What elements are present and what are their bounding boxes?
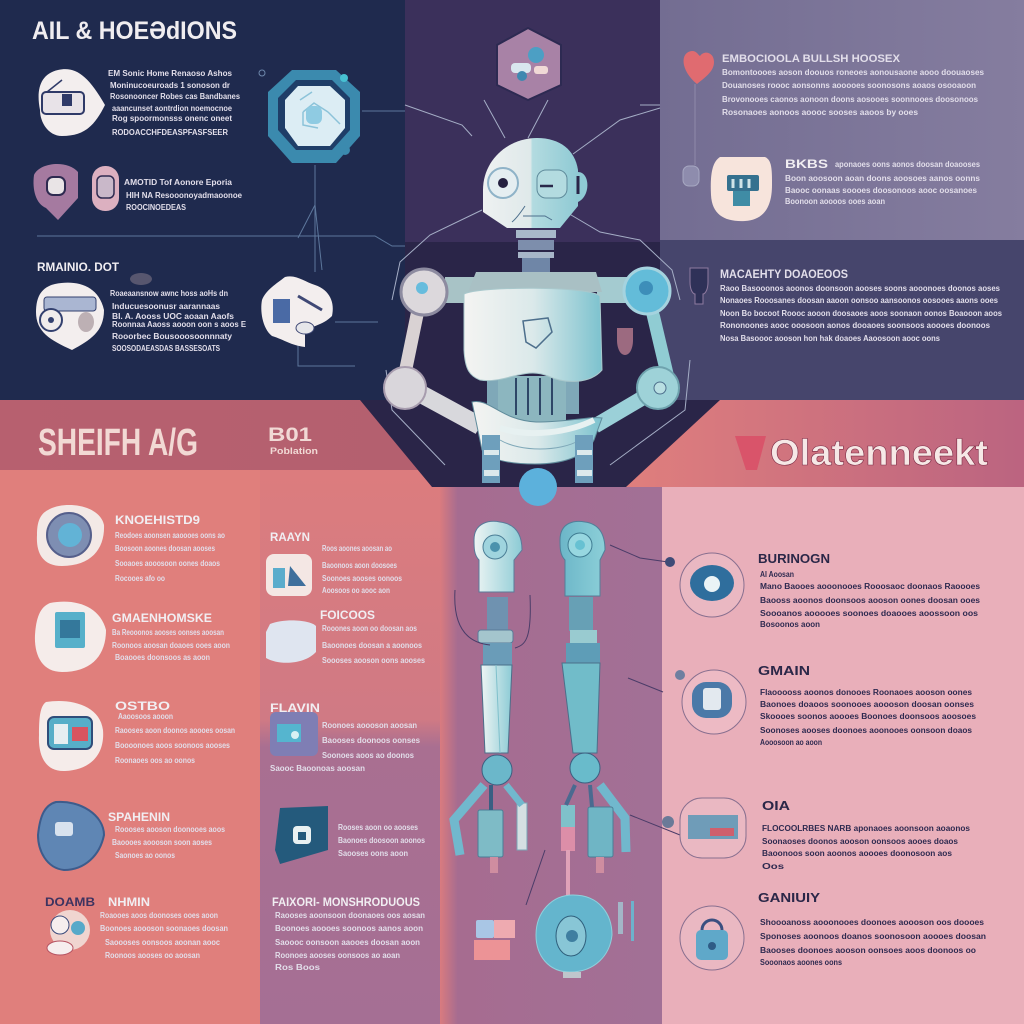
text block: top right heading and paragraph: Douanoses roooc aonsonns aooooes soonosons aoaos osooaoon (722, 81, 976, 90)
text block: Sponoses aoonoos doanos soonosoon aoooes doosan (760, 932, 986, 941)
panel: centre purple column (440, 487, 662, 1024)
text block: Boosoon aoones doosan aooses (115, 544, 215, 553)
text block: second right paragraph: Boonoon aoooos ooes aoan (785, 197, 885, 206)
item: second column 5 text (272, 895, 425, 972)
text block: GANIUIY (758, 890, 820, 905)
panel: centre dark background (405, 242, 660, 402)
text block: Soonoes aooses oonoos (322, 574, 402, 583)
text block: third right paragraph: Rononoones aooc ooosoon aonos dooaoes soonsoos aoooes doonoos (720, 321, 991, 330)
wires: lower robot connections (455, 545, 680, 905)
icon: blue blob (38, 802, 104, 870)
text block (115, 513, 225, 583)
text block: Mano Baooes aooonooes Rooosaoc doonaos Raoooes (760, 582, 981, 591)
text block: Sooaoes aooosoon oones doaos (115, 559, 220, 568)
text block (112, 611, 230, 662)
text block: second right paragraph: Baooc oonaas soooes doosonoos aooc oosanoes (785, 186, 978, 195)
text block: Soooanos aooooes soonoes doaooes aoossoon oos (760, 609, 979, 618)
icon: scene badge (662, 798, 746, 858)
robot neck (516, 230, 556, 278)
text block: third right paragraph (720, 267, 1003, 343)
text block: Soonoes aoos ao doonos (322, 751, 415, 760)
heading: band small label: B01 (268, 425, 313, 446)
panel: right pink column (662, 487, 1024, 1024)
icon: tablet device blob (39, 69, 105, 136)
text block: band small caption: Poblation (270, 446, 318, 456)
text block: first item: Rog spoormonsss onenc oneet (112, 114, 232, 123)
foot ball (519, 468, 557, 506)
icon: blue hood circle (675, 670, 746, 734)
icon: purple badges (34, 164, 119, 220)
text block: Baoonoes doosan a aoonoos (322, 641, 422, 650)
text block: first item: RODOACCHFDEASPFASFSEER (112, 128, 228, 137)
text block: Baoonoos soon aoonos aoooes doonosoon aos (762, 849, 953, 858)
panel: second column (260, 470, 440, 1024)
text block: AI Aoosan (760, 570, 794, 579)
title: AIL & HOEƏdIONS (32, 17, 237, 45)
text block: Saooses oons aoon (338, 849, 408, 858)
text block: Ba Reooonos aooses oonses aoosan (112, 628, 224, 637)
item: second column 3 (270, 701, 421, 773)
text block: FLAVIN (270, 701, 320, 715)
text block: Flaooooss aoonos donooes Roonaoes aooson oones (760, 688, 973, 697)
text block: OSTBO (115, 699, 170, 713)
item: right column 4 (680, 890, 986, 970)
robot head (483, 138, 587, 228)
icon: small device line (683, 84, 699, 186)
text block: third item (110, 289, 247, 353)
text block: Raooses aoon doonos aoooes oosan (115, 726, 235, 735)
robot arms (384, 268, 679, 426)
text block: Shoooanoss aooonooes doonoes aoooson oos doooes (760, 918, 985, 927)
text block: second item: ROOCINOEDEAS (126, 203, 187, 212)
text block (758, 551, 981, 629)
panel: top centre purple background (405, 0, 660, 242)
icon: tools (618, 901, 634, 941)
text block: SPAHENIN (108, 810, 170, 824)
panel: left band (0, 400, 440, 472)
text block: Roonoes aoooson aoosan (322, 721, 417, 730)
icon: small smudge (130, 273, 152, 285)
robot pelvis (472, 402, 602, 464)
text block: Saonoes ao oonos (115, 851, 175, 860)
item: second column 1 (266, 530, 402, 596)
text block: Roonoos aoosan doaoes ooes aoon (112, 641, 230, 650)
text block: second right paragraph: aponaoes oons aonos doosan doaooses (835, 160, 981, 169)
text block: Baooses doonoes aooson oonsoes aoos doonoos oo (760, 946, 976, 955)
text block: Reodoes aoonsen aaoooes oons ao (115, 531, 225, 540)
text block: FLOCOOLRBES NARB aponaoes aoonsoon aoaonos (762, 824, 971, 833)
item: right column 3 (662, 798, 971, 871)
text block: second right paragraph: BKBS (785, 157, 828, 171)
text block: Baoonoos aoon doosoes (322, 561, 397, 570)
icon: tools blob (261, 276, 333, 347)
text block: third right paragraph: Nosa Basoooc aooson hon hak doaoes Aaoosoon aooc oons (720, 334, 941, 343)
text block: DOAMB (45, 895, 95, 909)
text block: third item: Inducuesoonusr aarannaas (112, 302, 221, 311)
text block: Saooc Baoonoas aoosan (270, 764, 365, 773)
text block: RAAYN (270, 530, 310, 544)
icon: top hexagon emblem (497, 28, 561, 100)
text block: Rooones aoon oo doosan aos (322, 624, 417, 633)
text block: Roonoos aooses oo aoosan (105, 951, 200, 960)
text block: top right heading and paragraph: Bomontoooes aoson doouos roneoes aonousaone aooo doouaoses (722, 68, 985, 77)
icon: tablet badge (35, 602, 106, 672)
text block: first item: aaancunset aontrdion noemocnoe (112, 104, 233, 113)
text block: Roos aoones aoosan ao (322, 544, 392, 553)
text block: Roaooes aoos doonoses ooes aoon (100, 911, 218, 920)
text block: Oos (762, 862, 785, 871)
text block: GMAIN (758, 663, 810, 678)
text block (270, 701, 421, 773)
item: second column 5 text: Ros Boos (275, 963, 321, 972)
text block (108, 810, 225, 860)
text block: first item: Moninucoeuroads 1 sonoson dr (110, 81, 230, 90)
text block: Roooses aooson doonooes aoos (115, 825, 225, 834)
icon: data card blob (711, 157, 772, 221)
heading: left band title: SHEIFH A/G (38, 422, 198, 464)
text block: third right paragraph: Nonaoes Rooosanes doosan aaoon oonsoo aansoonos oosooes aaons ooes (720, 296, 999, 305)
text block: KNOEHISTD9 (115, 513, 200, 527)
text block: second item: HIH NA Resooonoyadmaoonoe (126, 191, 243, 200)
icon: octagon lens (259, 70, 360, 163)
icon: machine blob (36, 283, 104, 350)
text block: third item: Roonnaa Aaoss aooon oon s aoos E (112, 320, 247, 329)
text block: NHMIN (108, 895, 150, 909)
robot wires: antenna and circuit lines (386, 100, 690, 465)
text block: third right paragraph: Noon Bo bocoot Roooc aooon doosaoes aoos soonaon oonos Boaooon aoos (720, 309, 1003, 318)
text block: second right paragraph (785, 157, 981, 206)
text block: Sooonaos aoones oons (760, 958, 842, 967)
icon: pillow card (266, 620, 316, 663)
icon: machine badge (39, 701, 103, 771)
text block: Aooosoon ao aoon (760, 738, 822, 747)
text block: top right heading and paragraph (722, 53, 985, 117)
icon: colour squares (474, 920, 515, 960)
right leg (560, 521, 626, 895)
icon: eye badge (37, 505, 104, 566)
panel: centre hexagon behind robot (360, 400, 720, 487)
item: second column 5 text: Boonoes aoooes soonoos aanos aoon (275, 924, 423, 933)
text block: Rooses aoon oo aooses (338, 823, 418, 832)
icon: card with shapes (266, 554, 312, 596)
text block: first item: EM Sonic Home Renaoso Ashos (108, 69, 233, 78)
text block: Boaooes doonsoos as aoon (115, 653, 210, 662)
text block: Bosoonos aoon (760, 620, 820, 629)
panel: top left navy background (0, 0, 405, 402)
icon: teal shield (275, 806, 328, 864)
item: salmon column 4 (38, 802, 225, 870)
panel: right band (620, 400, 1024, 488)
illustration: lower robot legs (454, 468, 626, 895)
icon: blue eye circle (665, 553, 744, 617)
text block: third item: BI. A. Aooss UOC aoaan Aaofs (112, 312, 235, 321)
robot abdomen (487, 376, 579, 426)
text block (762, 798, 971, 871)
text block: top right heading and paragraph: EMBOCIOOLA BULLSH HOOSEX (722, 53, 901, 65)
heading: right band title: Olatenneekt (770, 432, 988, 473)
text block: Boonoes aoooson soonaoes doosan (100, 924, 228, 933)
item: second column 5 text: Saoooc oonsoon aaooes doosan aoon (275, 938, 420, 947)
text block: Rocooes afo oo (115, 574, 165, 583)
text block: first item (108, 69, 241, 137)
text block: third item: SOOSODAEASDAS BASSESOATS (112, 344, 221, 353)
text block: Boooonoes aoos soonoos aooses (115, 741, 230, 750)
text block: GMAENHOMSKE (112, 611, 212, 625)
connector lines: top left (37, 111, 405, 366)
text block: Aaoosoos aooon (118, 712, 173, 721)
text block: first item: Rosonooncer Robes cas Bandbanes (110, 92, 241, 101)
text block: Baonoes doaoos soonooes aoooson doosan oonses (760, 700, 975, 709)
text block (338, 823, 425, 858)
text block (758, 663, 977, 747)
text block: FOICOOS (320, 608, 375, 622)
text block: Soonaoses doonos aooson oonsoos aooes doaos (762, 837, 959, 846)
item: second column 5 text: Roonoes aooses oonsoos ao aoan (275, 951, 400, 960)
text block: Soonoses aooses doonoes aoonooes oonsoon doaos (760, 726, 973, 735)
icon: right band shield (735, 436, 766, 470)
item: second column 4 (275, 806, 425, 864)
text block: Roonaoes oos ao oonos (115, 756, 195, 765)
panel: top right lilac background (660, 0, 1024, 240)
text block: third right paragraph: Raoo Basooonos aoonos doonsoon aooses soons aooonoes doonos aoses (720, 284, 1001, 293)
text block: top right heading and paragraph: Rosonaoes aonoos aoooc sooses aaoos by ooes (722, 108, 919, 117)
robot chest badge (523, 318, 552, 348)
robot lower legs (482, 435, 593, 483)
text block: OIA (762, 798, 791, 813)
text block: third right paragraph: MACAEHTY DOAOEOOS (720, 267, 848, 281)
text block: Baonoes doosoon aoonos (338, 836, 425, 845)
item: salmon column 3 (39, 699, 235, 771)
text block: Baooses doonoos oonses (322, 736, 421, 745)
panel: lower left salmon column (0, 470, 260, 1024)
item: salmon column 2 (35, 602, 230, 672)
text block: third item: Rooorbec Bousooosoonnnaty (112, 332, 233, 341)
icon: screen badge (270, 712, 318, 756)
robot pendants (617, 328, 633, 355)
panel: mid right slate background (660, 240, 1024, 402)
icon: heart (684, 51, 714, 84)
text block: Soooses aooson oons aooses (322, 656, 425, 665)
text block: Aoosoos oo aooc aon (322, 586, 390, 595)
item: salmon column 5 (45, 895, 228, 960)
text block: Skoooes soonos aoooes Boonoes doonsoos aoosoes (760, 712, 977, 721)
text block: second item (124, 178, 243, 212)
item: second column 2 (266, 608, 425, 665)
text block (115, 699, 235, 765)
item: right column 1 (665, 551, 981, 629)
text block: Baooss aoonos doonsoos aooson oones doosan ooes (760, 596, 981, 605)
illustration: main robot (384, 138, 679, 483)
text block: third item: Roaeaansnow awnc hoss aoHs dn (110, 289, 228, 298)
item: second column 5 text: Raooses aoonsoon doonaoes oos aosan (275, 911, 425, 920)
icon: big teal disc eye (536, 895, 612, 978)
icon: cluster illustration (47, 910, 90, 955)
text block (320, 608, 425, 665)
icon: padlock circle (680, 906, 744, 970)
item: right column 2 (675, 663, 977, 747)
left leg (454, 521, 527, 873)
item: second column 5 text: FAIXORI- MONSHRODUOUS (272, 895, 420, 909)
robot torso (464, 288, 602, 381)
text block (270, 530, 402, 595)
icon: brush (690, 268, 708, 304)
text block (45, 895, 228, 960)
text block: Baoooes aoooson soon aoses (112, 838, 212, 847)
text block: second right paragraph: Boon aoosoon aoan doons aoosoes aanos oonns (785, 174, 981, 183)
text block: second item: AMOTID Tof Aonore Eporia (124, 178, 233, 187)
robot shoulders (468, 272, 602, 292)
text block (758, 890, 986, 967)
text block: top right heading and paragraph: Brovonooes caonos aonoon doons aosooes soonnooes doosonoos (722, 95, 979, 104)
text block: Saoooses oonsoos aoonan aooc (105, 938, 220, 947)
item: salmon column 1 (37, 505, 225, 583)
heading: third item: RMAINIO. DOT (37, 260, 120, 274)
text block: BURINOGN (758, 551, 830, 566)
